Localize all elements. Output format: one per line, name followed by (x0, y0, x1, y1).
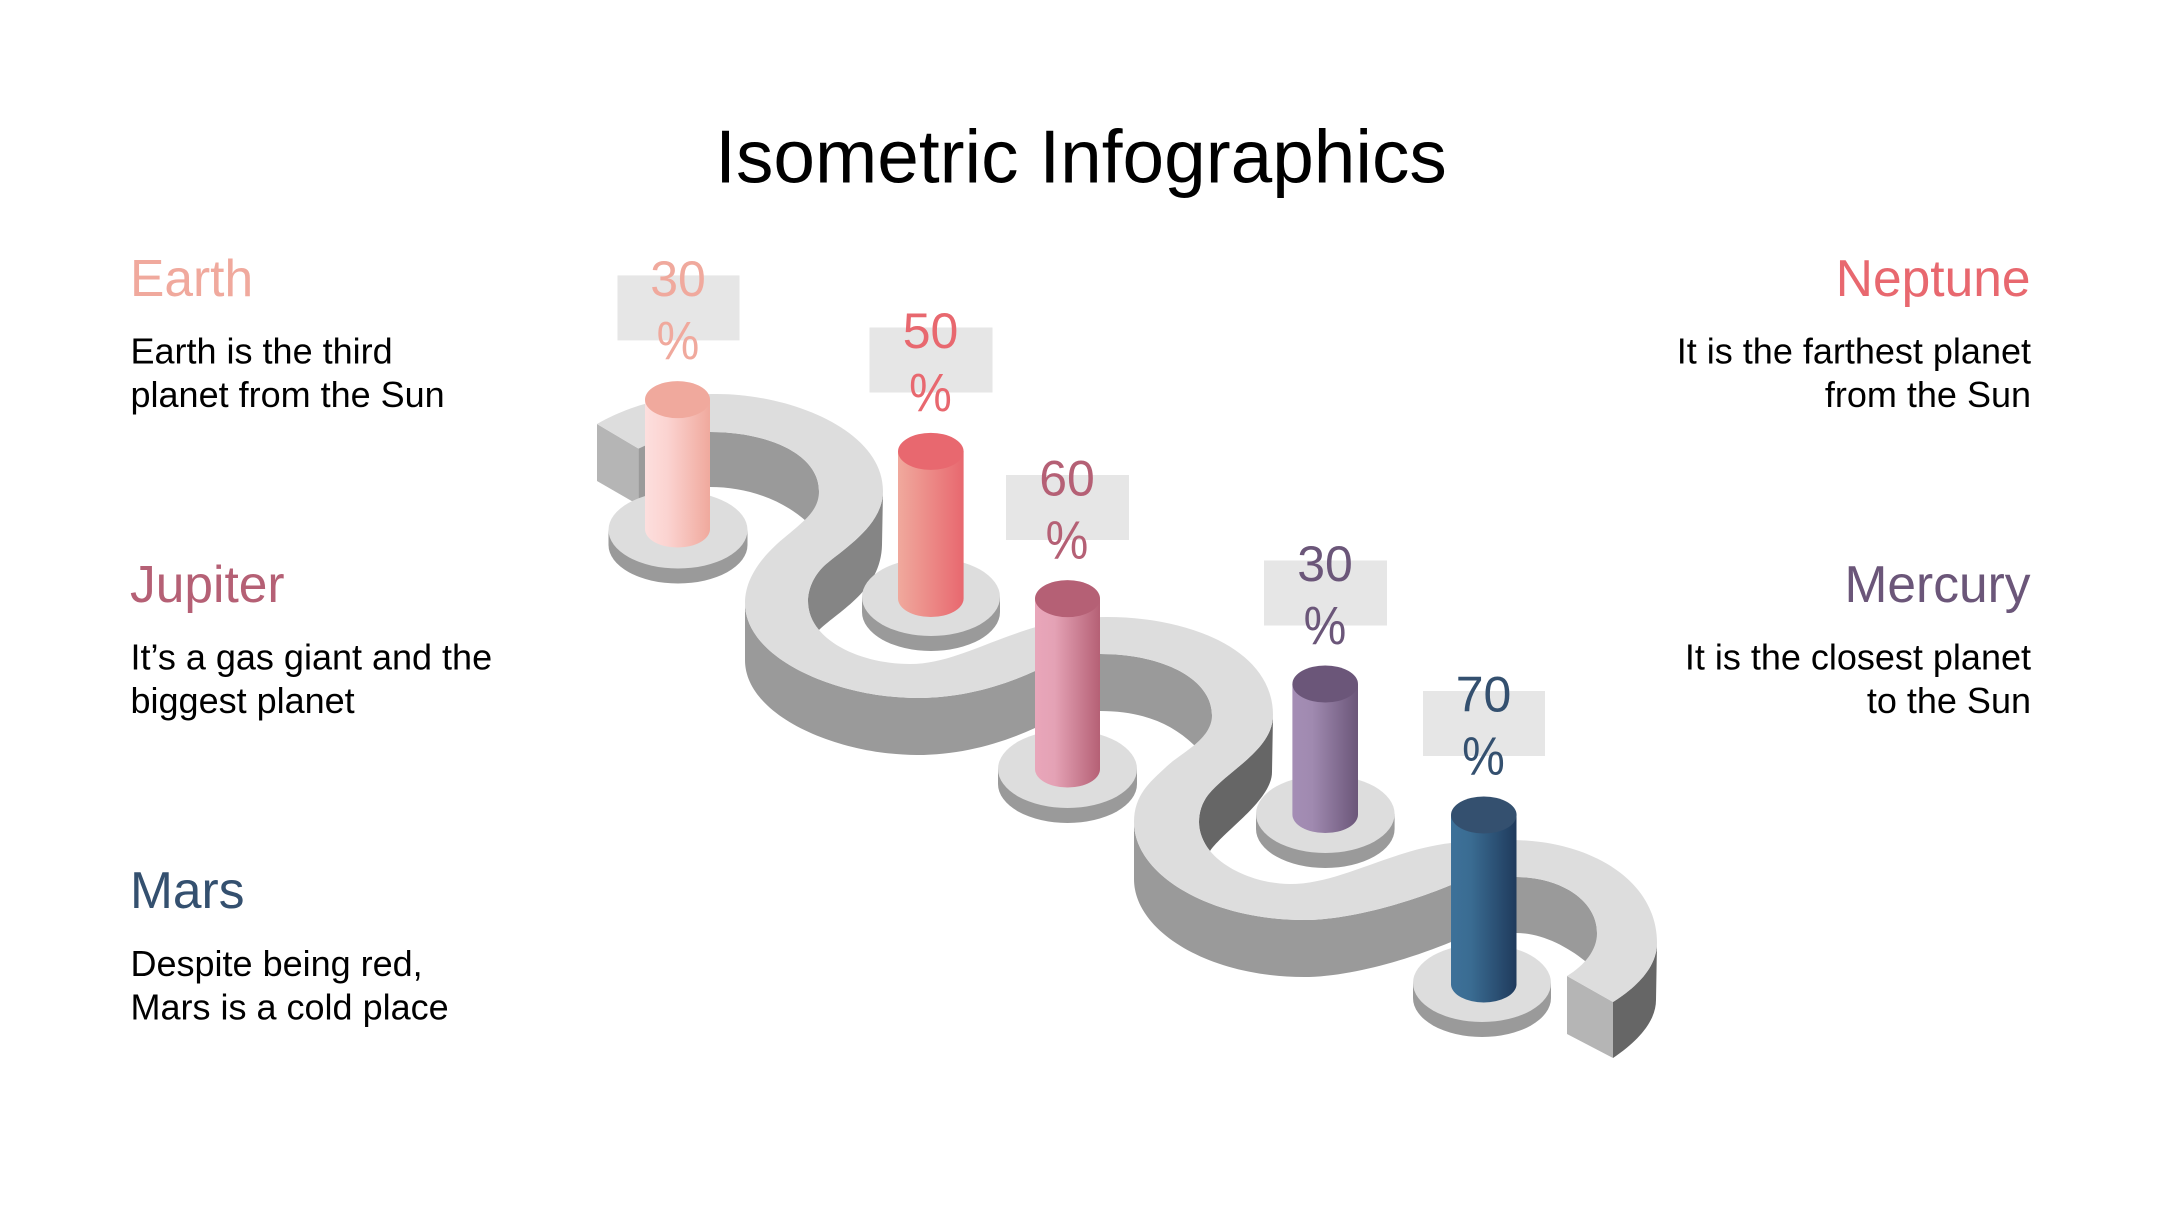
panel: Jupiter text: It’s a gas giant and the (130, 636, 492, 678)
panel: Jupiter text: biggest planet (130, 680, 355, 721)
value label: 50% Neptune: 50 (903, 303, 958, 359)
value label: 30% Mercury: 30 (1297, 536, 1353, 592)
panel: Neptune text: It is the farthest planet (1677, 330, 2031, 372)
value label: 30% Earth: % (657, 310, 699, 371)
value label: 60% Jupiter (1006, 450, 1129, 570)
value label: 30% Earth (618, 251, 740, 371)
Mars pillar 70% (1413, 796, 1551, 1037)
Earth pillar 30% (608, 381, 748, 584)
value label: 30% Mercury (1264, 536, 1387, 656)
panel: Mars text: Mars (130, 861, 244, 919)
isometric S-shaped ribbon (597, 394, 1657, 1058)
Jupiter pillar 60% (998, 580, 1137, 823)
panel: Mercury text (1685, 555, 2031, 721)
value label: 70% Mars (1423, 666, 1545, 786)
value label: 30% Mercury: % (1304, 595, 1346, 656)
value label: 60% Jupiter: % (1046, 510, 1088, 570)
panel: Earth text: Earth (130, 249, 253, 307)
panel: Jupiter text: Jupiter (130, 555, 285, 613)
panel: Earth text: planet from the Sun (130, 374, 445, 415)
panel: Neptune text (1677, 249, 2031, 415)
panel: Mars text (130, 861, 449, 1028)
title: Isometric Infographics (715, 114, 1447, 198)
value label: 70% Mars: % (1462, 726, 1505, 786)
panel: Mars text: Despite being red, (130, 943, 423, 984)
panel: Earth text: Earth is the third (130, 330, 393, 372)
panel: Earth text (130, 249, 445, 415)
value label: 30% Earth: 30 (650, 251, 706, 307)
value label: 50% Neptune (870, 303, 992, 423)
panel: Neptune text: Neptune (1836, 249, 2030, 307)
value label: 50% Neptune: % (909, 362, 952, 423)
value label: 60% Jupiter: 60 (1039, 450, 1095, 506)
panel: Mercury text: to the Sun (1867, 680, 2031, 721)
panel: Mercury text: It is the closest planet (1685, 636, 2031, 678)
Neptune pillar 50% (862, 433, 1000, 651)
panel: Mercury text: Mercury (1845, 555, 2031, 613)
panel: Neptune text: from the Sun (1825, 374, 2031, 415)
panel: Jupiter text (130, 555, 492, 721)
Mercury pillar 30% (1256, 666, 1395, 868)
value label: 70% Mars: 70 (1456, 666, 1511, 722)
panel: Mars text: Mars is a cold place (130, 986, 449, 1028)
